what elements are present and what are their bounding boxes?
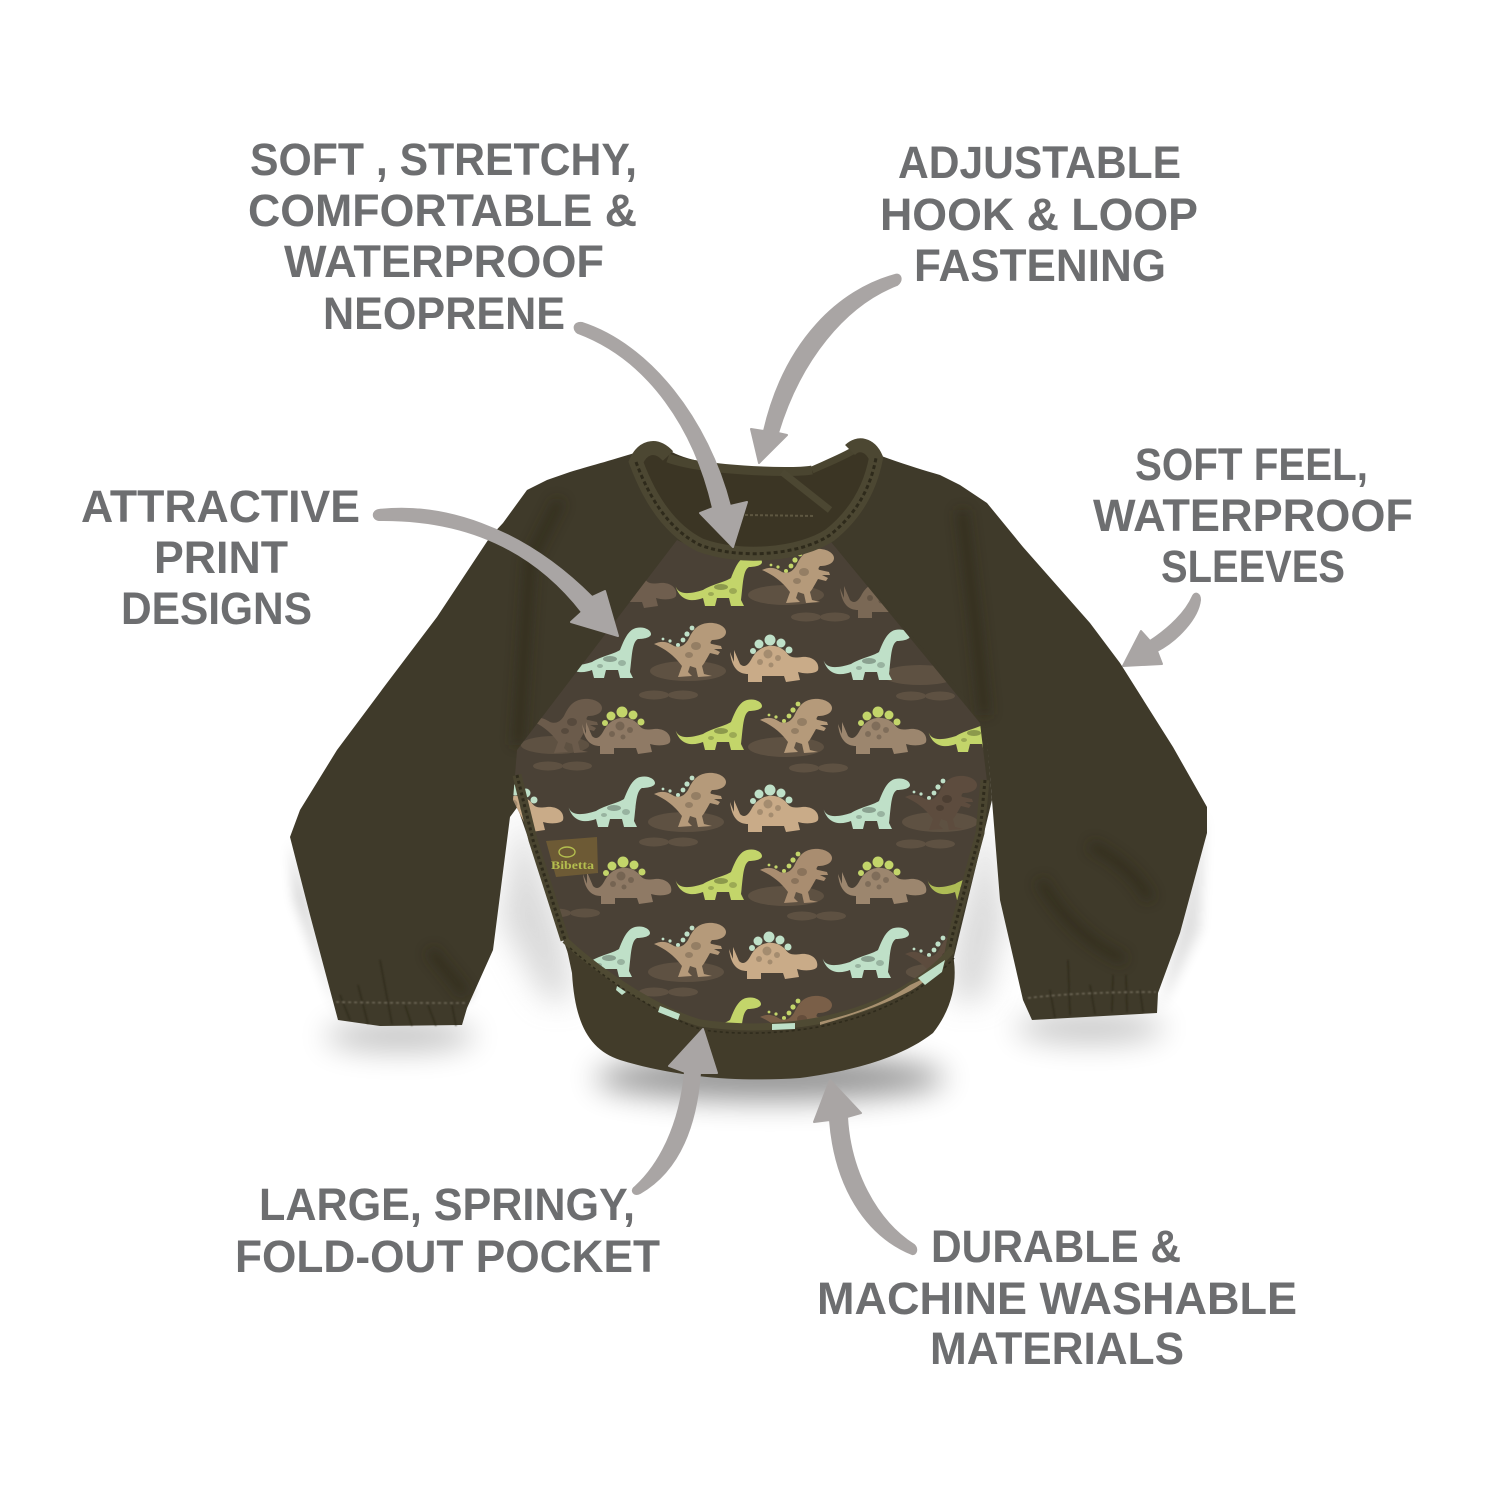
- label: print designs: DESIGNS: [121, 583, 312, 634]
- soft drop shadows under the bib: [290, 810, 1205, 1100]
- label: adjustable fastening: HOOK & LOOP: [880, 189, 1198, 240]
- row 1: [675, 555, 762, 606]
- label: materials: MATERIALS: [930, 1323, 1184, 1374]
- arrow: fastening callout: [751, 275, 901, 463]
- side binding: [517, 775, 565, 940]
- left sleeve: [290, 448, 680, 1026]
- row 2: [576, 628, 651, 678]
- left cuff gathers: [336, 960, 465, 1026]
- label: materials: [817, 1221, 1297, 1374]
- label: soft stretchy neoprene: [248, 134, 637, 339]
- mud and footprints: [521, 585, 978, 996]
- label: soft stretchy neoprene: COMFORTABLE &: [248, 185, 637, 236]
- neck interior: [636, 446, 877, 554]
- label: soft stretchy neoprene: WATERPROOF: [284, 236, 604, 287]
- arrow: materials callout: [814, 1080, 916, 1254]
- label: print designs: [81, 481, 360, 634]
- label: pocket: [235, 1179, 660, 1282]
- right sleeve: [825, 446, 1207, 1020]
- label: materials: DURABLE &: [931, 1221, 1181, 1272]
- row 6: [593, 926, 650, 977]
- fold-out pocket: [565, 940, 955, 1079]
- label: adjustable fastening: ADJUSTABLE: [898, 137, 1181, 188]
- label: soft stretchy neoprene: NEOPRENE: [323, 288, 565, 339]
- sleeve folds: [430, 500, 1150, 995]
- label: soft stretchy neoprene: SOFT , STRETCHY,: [250, 134, 637, 185]
- row 7: [725, 998, 761, 1024]
- garment base layer: [515, 468, 992, 965]
- arrow: sleeves callout: [1123, 594, 1200, 666]
- dinosaur print pattern: [513, 548, 984, 1024]
- label: adjustable fastening: [880, 137, 1198, 291]
- label: print designs: PRINT: [154, 532, 288, 583]
- row 4: [513, 784, 538, 804]
- label: sleeves: WATERPROOF: [1093, 490, 1413, 541]
- label: print designs: ATTRACTIVE: [81, 481, 360, 532]
- printed front panel: [513, 537, 988, 1026]
- label: sleeves: SLEEVES: [1161, 541, 1345, 592]
- label: pocket: FOLD-OUT POCKET: [235, 1231, 660, 1282]
- right cuff gathers: [1028, 960, 1156, 1018]
- label: sleeves: [1093, 439, 1413, 592]
- arrow: print designs callout: [374, 509, 618, 636]
- bib: sleeved garment: [290, 445, 1207, 1079]
- label: adjustable fastening: FASTENING: [914, 240, 1166, 291]
- brand label: Bibetta: [551, 858, 594, 872]
- label: sleeves: SOFT FEEL,: [1135, 439, 1368, 490]
- label: materials: MACHINE WASHABLE: [817, 1273, 1297, 1324]
- collar binding: [636, 445, 876, 554]
- row 3: [530, 699, 602, 753]
- row 5: [603, 856, 646, 876]
- arrow: pocket callout: [633, 1029, 717, 1194]
- brand label: [546, 837, 598, 877]
- arrow: neoprene callout: [575, 323, 747, 547]
- label: pocket: LARGE, SPRINGY,: [259, 1179, 635, 1230]
